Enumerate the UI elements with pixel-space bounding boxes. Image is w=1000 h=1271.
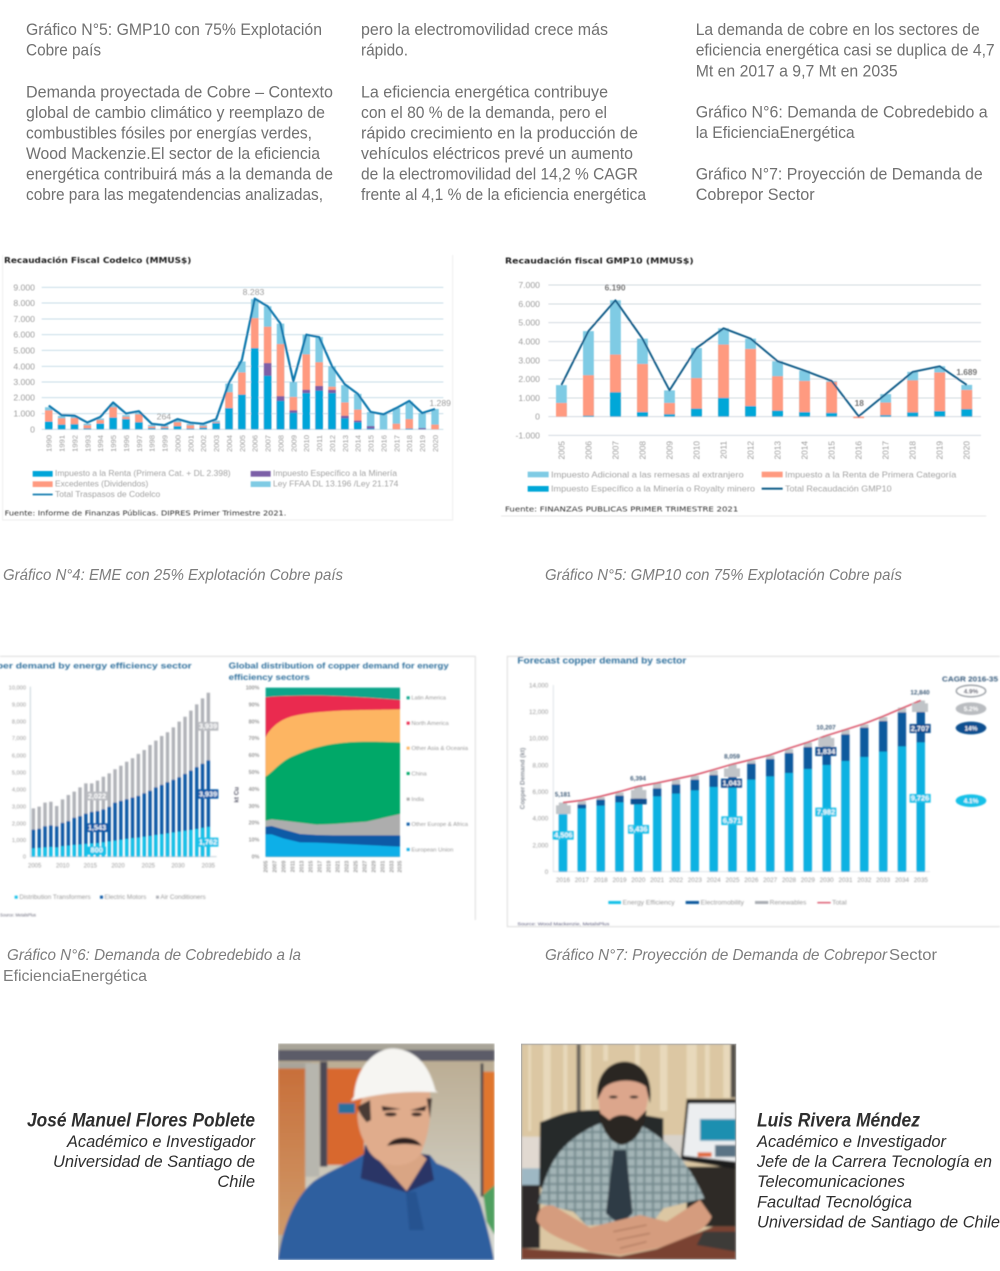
right chart axis title: kt Cu [234,787,241,803]
left chart y labels [9,686,26,861]
shirt [278,1153,494,1260]
y axis labels: 6.000 [518,299,540,309]
right chart x labels: 2007 [273,861,279,873]
right chart x labels [264,861,404,873]
right chart legend: China [411,771,428,777]
value chips: 6,571 [723,816,741,825]
right chart legend: North America [411,721,450,727]
monitor [681,1099,736,1169]
left chart y labels: 1,000 [12,838,26,844]
x axis years: 2034 [895,877,910,884]
left chart legend: Distribution Transformers [19,895,91,901]
value chips: 4,506 [554,831,573,840]
caption: Gráfico 5: Gráfico N°5: GMP10 con 75% Explotación Cobre país [545,567,902,584]
right chart x labels: 2019 [327,861,333,873]
left chart x labels: 2035 [202,863,216,869]
x axis years: 2006 [251,435,260,452]
chart title: Forecast copper demand by sector [517,656,687,666]
left chart x labels: 2020 [111,863,125,869]
x axis years: 2013 [772,441,782,460]
right chart title [229,660,449,682]
x axis years [45,434,440,452]
y axis labels: 7.000 [13,314,35,324]
y axis labels: -1.000 [515,430,540,440]
right chart y labels: 80% [249,719,260,725]
left chart y labels: 8,000 [12,719,26,725]
CAGR column: 4.1% [964,798,979,805]
caption: Gráfico 6: Gráfico N°6: Demanda de Cobredebido a la [7,947,301,964]
right chart x labels: 2027 [363,861,369,873]
y axis labels: 2,000 [532,842,549,849]
text column 1: Wood Mackenzie.El sector de la eficiencia [26,145,321,163]
caption: Gráfico 7: Gráfico N°7: Proyección de Demanda de Cobrepor [545,947,888,964]
x axis years: 2009 [664,441,674,460]
text column 1: cobre para las megatendencias analizadas, [26,186,323,204]
text column 2: con el 80 % de la demanda, pero el [361,104,607,122]
left chart y labels: 2,000 [12,821,26,827]
face [357,1092,430,1165]
author block: Luis Rivera Méndez: Luis Rivera Méndez [757,1111,920,1132]
legend: Ley FFAA DL 13.196 /Ley 21.174 [273,479,399,489]
left chart value chips: 1,543 [88,823,106,832]
right chart y labels: 40% [249,787,260,793]
photo: Luis Rivera Méndez [521,1044,736,1260]
y axis labels: 3.000 [13,377,35,387]
x axis years: 2002 [199,435,208,452]
x axis years: 2020 [431,435,440,452]
x axis years: 2021 [650,877,665,884]
text column 2: frente al 4,1 % de la eficiencia energética [361,186,647,204]
CAGR column: 4.9% [964,688,979,695]
x axis years: 1995 [109,435,118,452]
value labels: 8.283 [243,287,265,297]
chair [539,1110,663,1195]
arms and hands [537,1200,712,1255]
left chart y labels: 4,000 [12,787,26,793]
y axis labels: 10,000 [529,736,549,743]
left chart x labels [28,863,216,869]
caption: Gráfico 4: Gráfico N°4: EME con 25% Explotación Cobre país [3,567,343,584]
value chips [553,703,931,840]
y axis labels: 0 [545,869,549,876]
x axis years: 2023 [688,877,702,884]
right chart y labels: 70% [249,736,260,742]
x axis years: 2012 [745,441,755,460]
left chart value chips: 2,022 [88,791,106,800]
CAGR column: 14% [965,725,978,732]
left chart y labels: 6,000 [12,753,26,759]
y axis labels: 0 [30,424,35,434]
x axis years: 2017 [881,441,891,460]
x axis years: 1993 [83,435,92,452]
text column 1: Cobre país [26,42,101,60]
y axis labels: 12,000 [529,709,549,716]
y axis labels: 2.000 [13,393,35,403]
x axis years: 2019 [418,435,427,452]
left chart stacked bars [32,693,210,857]
value labels [157,287,451,422]
x axis years: 1998 [148,435,157,452]
x axis years: 1996 [122,435,131,452]
author block: José Manuel Flores Poblete: Universidad de Santiago de [53,1153,255,1171]
right chart legend [407,696,469,853]
x axis years: 2027 [763,877,778,884]
right chart y labels: 50% [249,770,260,776]
right chart y labels [246,686,260,860]
photo: José Manuel Flores Poblete [278,1043,495,1260]
x axis years: 2033 [876,877,891,884]
legend [608,900,847,907]
x axis years: 1992 [70,435,79,452]
source: Source: Wood Mackenzie, MetalsPlus [517,922,610,928]
x axis years: 2032 [857,877,872,884]
y axis labels: 6.000 [13,330,35,340]
x axis years: 2005 [556,441,566,460]
desk [522,1227,736,1259]
x axis years: 2026 [744,877,759,884]
legend: Renewables [770,900,806,907]
helmet [351,1048,438,1101]
caption: Gráfico 7: Sector [889,947,938,964]
source: Fuente: FINANZAS PUBLICAS PRIMER TRIMESTRE 2021 [505,505,738,514]
right chart legend: India [411,797,425,803]
x axis years: 2025 [725,877,740,884]
right chart y labels: 10% [249,838,260,844]
right chart title: efficiency sectors [229,672,310,682]
value chips: 7,982 [817,807,835,816]
legend: Impuesto Específico a la Minería o Royalty minero [551,483,755,493]
author block: Luis Rivera Méndez: Facultad Tecnológica [757,1194,912,1212]
CAGR column [942,674,999,807]
x axis years: 2017 [575,877,589,884]
author block: Luis Rivera Méndez: Telecomunicaciones [757,1173,905,1191]
source: Fuente: Informe de Finanzas Públicas. DIPRES Primer Trimestre 2021. [5,509,286,517]
y axis labels: 5.000 [518,318,540,328]
legend [528,469,957,493]
value labels [605,283,978,408]
x axis years: 2014 [354,434,363,452]
left chart y labels: 9,000 [12,702,26,708]
y axis labels [515,280,540,440]
right chart x labels: 2029 [372,861,378,873]
text column 3: la EficienciaEnergética [696,124,855,142]
text column 3: eficiencia energética casi se duplica de 4,7 [696,42,995,60]
stacked bars [559,700,925,872]
shirt [538,1123,704,1226]
right chart x labels: 2033 [390,861,396,873]
face [598,1079,650,1122]
text column 1: combustibles fósiles por energías verdes, [26,124,312,142]
y axis labels: 1.000 [13,409,35,419]
right chart x labels: 2011 [291,861,297,872]
right chart x labels: 2031 [381,861,387,873]
x axis years: 2008 [637,441,647,460]
right chart y labels: 100% [246,686,260,692]
legend [33,468,399,499]
x axis years: 2024 [707,877,721,884]
x axis years: 2018 [908,441,918,460]
x axis years: 2008 [276,435,285,452]
x axis years: 2015 [826,441,836,460]
left chart value chips: 3,939 [199,789,217,798]
legend: Electromobility [701,900,745,907]
text column 1: Gráfico N°5: GMP10 con 75% Explotación [26,21,322,39]
x axis years: 2010 [302,435,311,452]
x axis years: 2015 [367,435,376,452]
left chart y labels: 7,000 [12,736,26,742]
text column 2: vehículos eléctricos prevé un aumento [361,145,633,163]
y axis labels [13,282,35,434]
y axis labels: 2.000 [518,374,540,384]
author block: Luis Rivera Méndez: Jefe de la Carrera Tecnología en [756,1153,992,1171]
y axis labels: 5.000 [13,345,35,355]
value labels: 1.689 [956,367,978,377]
right chart x labels: 2009 [282,861,288,873]
total labels: 12,840 [910,689,930,696]
left chart legend: Electric Motors [104,895,146,901]
x axis years: 2003 [212,435,221,452]
x axis years [556,441,972,460]
right chart title: Global distribution of copper demand for energy [229,660,449,670]
author block: Luis Rivera Méndez: Universidad de Santiago de Chile [757,1214,1000,1232]
right chart y labels: 90% [249,702,260,708]
text column 3: Cobrepor Sector [696,186,815,204]
chart title: Recaudación fiscal GMP10 (MMUS$) [505,255,694,265]
left chart legend: Air Conditioners [160,895,206,901]
x axis years: 1997 [135,435,144,452]
x axis years: 2007 [264,435,273,452]
y axis labels: 0 [535,412,540,422]
author block: José Manuel Flores Poblete: Chile [217,1173,255,1191]
legend: Impuesto Adicional a las remesas al extranjero [551,469,744,479]
right chart y labels: 20% [249,821,260,827]
legend: Impuesto a la Renta (Primera Cat. + DL 2.398) [55,468,231,478]
text column 1: energética contribuirá más a la demanda de [26,166,333,184]
right chart y labels: 0% [252,854,260,860]
right chart x labels: 2013 [300,861,306,873]
y axis labels: 8.000 [13,298,35,308]
right chart legend: European Union [411,847,453,853]
left chart y labels: 10,000 [9,686,26,692]
right chart legend: Other Asia & Oceania [411,746,469,752]
chart title: Recaudación Fiscal Codelco (MMUS$) [4,255,191,265]
x axis years: 2009 [289,435,298,452]
x axis years: 2035 [914,877,928,884]
right chart x labels: 2035 [398,861,404,873]
x axis years: 1991 [58,435,67,452]
text column 3: Mt en 2017 a 9,7 Mt en 2035 [696,62,898,80]
right chart x labels: 2015 [309,861,315,873]
y axis labels: 4.000 [518,337,540,347]
legend: Excedentes (Dividendos) [55,479,149,489]
value labels: 1.289 [429,398,451,408]
text column 2: pero la electromovilidad crece más [361,21,608,39]
x axis years: 2030 [820,877,834,884]
right chart y labels: 30% [249,804,260,810]
left chart x labels: 2030 [171,863,185,869]
y axis labels: 7.000 [518,280,540,290]
x axis years: 2019 [935,441,945,460]
chart: Forecast copper demand by sector [507,656,1000,928]
CAGR column: CAGR 2016-35 [942,674,999,683]
text column 2: rápido. [361,42,408,60]
x axis years: 2018 [594,877,608,884]
author block: Luis Rivera Méndez [756,1111,1000,1232]
total labels: 5,181 [555,792,571,799]
left chart value chips [86,722,218,855]
left chart source: Source: MetalsPlus [0,913,37,918]
right chart legend: Latin America [411,696,447,702]
y axis labels: 3.000 [518,355,540,365]
x axis years: 2005 [238,435,247,452]
x axis years: 2016 [854,441,864,460]
y axis labels: 8,000 [532,762,549,769]
x axis years: 2020 [631,877,646,884]
y axis labels: 9.000 [13,282,35,292]
left chart x labels: 2025 [142,863,156,869]
x axis years: 2020 [962,441,972,460]
total labels: 6,394 [630,775,646,782]
left chart value chips: 3,939 [199,722,217,731]
x axis years [556,877,928,884]
text column 1: Demanda proyectada de Cobre – Contexto [26,83,333,101]
text column 2: de la electromovilidad del 14,2 % CAGR [361,166,638,184]
author block: José Manuel Flores Poblete: José Manuel Flores Poblete [27,1111,255,1132]
x axis years: 1994 [96,434,105,452]
x axis years: 2014 [799,441,809,460]
x axis years: 2022 [669,877,684,884]
total labels: 10,207 [816,725,836,732]
x axis years: 2018 [405,435,414,452]
stacked bars and total line [556,300,972,418]
right chart x labels: 2023 [345,861,351,873]
y axis labels: 6,000 [532,789,549,796]
left chart x labels: 2010 [56,863,70,869]
total labels: 8,059 [724,753,740,760]
x axis years: 2028 [782,877,797,884]
legend: Total Recaudación GMP10 [785,483,892,493]
chart: Recaudación Fiscal Codelco [3,255,453,520]
x axis years: 2004 [225,434,234,452]
x axis years: 2007 [610,441,620,460]
x axis years: 2019 [612,877,627,884]
x axis years: 2011 [718,441,728,459]
total labels [555,689,930,799]
right chart x labels: 2017 [318,861,324,873]
left chart y labels: 3,000 [12,804,26,810]
y axis labels [529,682,549,876]
y axis labels: 4,000 [532,816,549,823]
caption: Gráfico 6: EficienciaEnergética [3,968,147,985]
x axis years: 2012 [328,435,337,452]
legend: Total [832,900,847,907]
x axis years: 2016 [379,435,388,452]
x axis years: 1990 [45,435,54,452]
chart: Recaudación fiscal GMP10 [501,255,986,516]
text column 1 [26,21,333,204]
value labels: 264 [157,412,171,422]
value chips: 1,834 [817,747,836,756]
stacked bars and total line [45,299,439,429]
right chart x labels: 2021 [336,861,342,873]
text column 3: Gráfico N°7: Proyección de Demanda de [696,165,983,183]
CAGR column: 5.2% [964,706,979,713]
x axis years: 2011 [315,435,324,451]
text column 2: rápido crecimiento en la producción de [361,124,638,142]
left chart y labels: 5,000 [12,770,26,776]
text column 3: La demanda de cobre en los sectores de [696,21,980,39]
author block: José Manuel Flores Poblete: Académico e Investigador [66,1133,256,1151]
text column 2 [361,21,647,204]
author block: Luis Rivera Méndez: Académico e Investigador [756,1133,947,1151]
value chips: 1,043 [722,779,741,788]
text column 3 [696,21,995,204]
text column 1: global de cambio climático y reemplazo de [26,104,325,122]
x axis years: 2001 [186,435,195,452]
text column 3: Gráfico N°6: Demanda de Cobredebido a [696,104,988,122]
left chart x labels: 2015 [84,863,98,869]
author block: José Manuel Flores Poblete [27,1111,256,1191]
legend: Energy Efficiency [623,900,676,907]
y axis labels: 14,000 [529,682,549,689]
right chart stacked area [266,688,400,857]
left chart x labels: 2005 [28,863,42,869]
right chart y labels: 60% [249,753,260,759]
y axis title: Copper Demand (kt) [520,748,527,809]
y axis labels: 1.000 [518,393,540,403]
value chips: 9,726 [911,794,929,803]
left chart value chips: 1,762 [199,838,217,847]
x axis years: 2013 [341,435,350,452]
y axis labels: 4.000 [13,361,35,371]
x axis years: 2006 [583,441,593,460]
value chips: 2,707 [911,724,929,733]
value labels: 18 [855,398,864,408]
right chart x labels: 2025 [354,861,360,873]
x axis years: 2029 [801,877,815,884]
left chart value chips: 800 [91,846,103,855]
x axis years: 2000 [173,435,182,452]
x axis years: 2010 [691,441,701,460]
caption: Gráfico 6 [3,947,301,985]
value chips: 5,436 [629,825,648,834]
text column 2: La eficiencia energética contribuye [361,83,608,101]
left chart legend [15,895,206,901]
legend: Impuesto a la Renta de Primera Categoría [785,469,957,479]
legend: Total Traspasos de Codelco [55,489,161,499]
x axis years: 2017 [392,435,401,452]
x axis years: 2031 [838,877,853,884]
left chart y labels: 0 [23,855,26,861]
right chart x labels: 2005 [264,861,270,873]
x axis years: 1999 [161,435,170,452]
chart: copper demand by energy efficiency sector [0,656,475,920]
value labels: 6.190 [605,283,626,293]
x axis years: 2016 [556,877,571,884]
legend: Impuesto Específico a la Minería [273,468,397,478]
right chart legend: Other Europe & Africa [411,822,469,828]
